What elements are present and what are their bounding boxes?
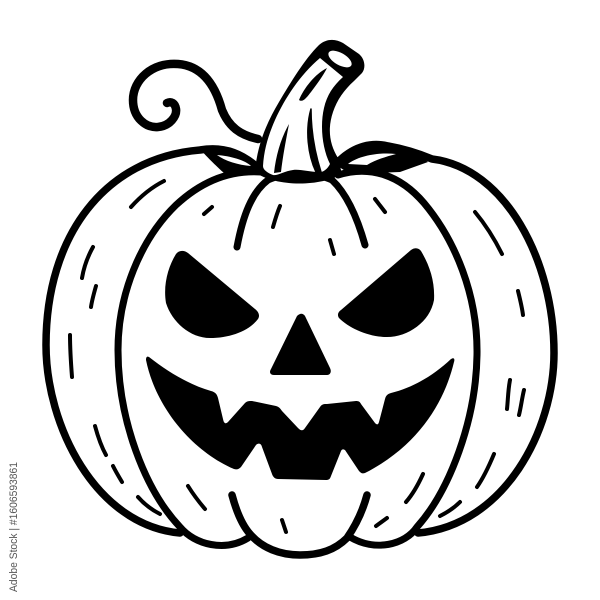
nose <box>270 314 331 375</box>
center lobe bottom <box>232 495 367 555</box>
stem <box>255 40 364 184</box>
pumpkin outline <box>46 145 554 555</box>
left inner lobe <box>118 172 262 545</box>
mouth <box>146 357 454 480</box>
right inner lobe <box>338 171 477 545</box>
left leaf <box>200 147 262 174</box>
stem outer <box>255 40 364 184</box>
leaf slivers <box>200 145 428 174</box>
stem groove lines <box>299 68 327 101</box>
curly vine <box>133 64 258 139</box>
stem cap opening <box>326 47 354 71</box>
stem inner <box>263 58 343 175</box>
right outer lobe <box>340 145 554 533</box>
credit text: Adobe Stock | #1606593861 <box>8 462 20 592</box>
right leaf <box>336 145 428 174</box>
left outer lobe <box>46 149 256 533</box>
center lobe top <box>237 174 365 247</box>
surface dashes <box>70 181 524 532</box>
left eye <box>165 251 259 338</box>
right eye <box>338 248 434 337</box>
